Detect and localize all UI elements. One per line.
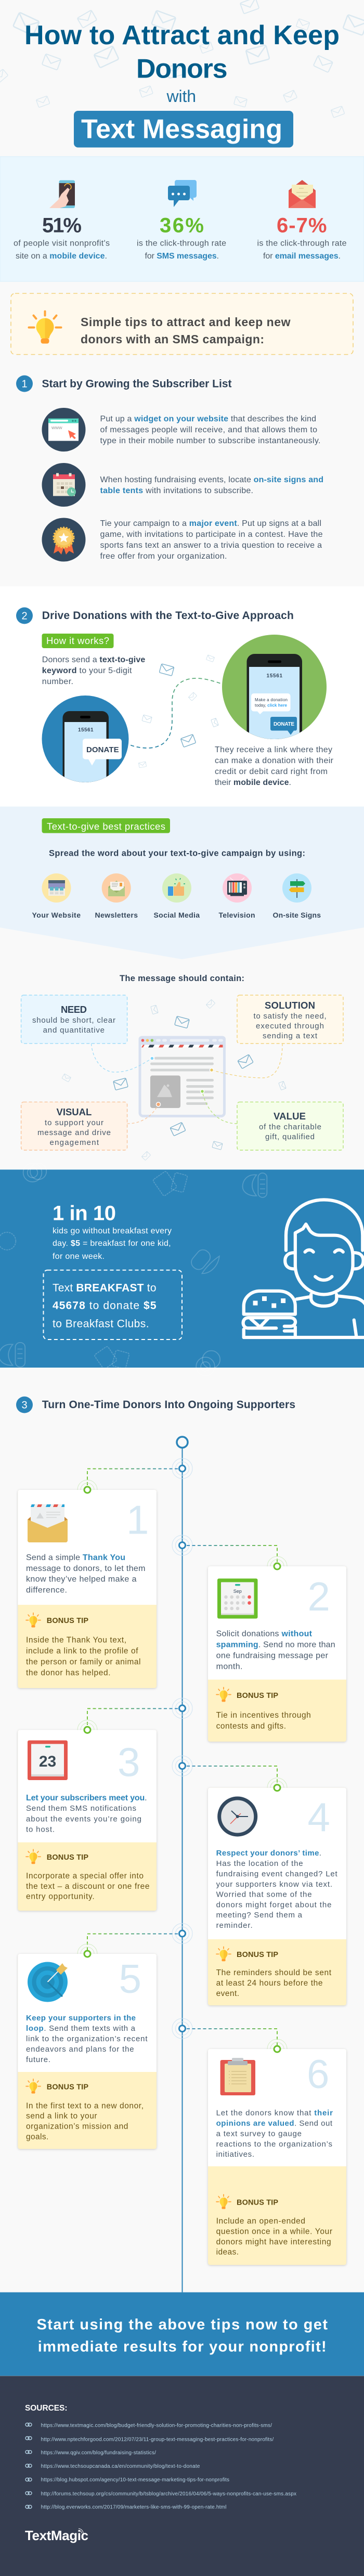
- bonus tip: ideas.: [216, 2248, 239, 2257]
- card 4: respect time: reminder.: [216, 1921, 253, 1930]
- card 6: opinions valued: 6: [307, 2051, 329, 2096]
- title: with: [166, 87, 196, 106]
- stat: email click-through: [257, 180, 347, 261]
- callout: visual: engagement: [50, 1138, 99, 1147]
- channel: newsletters: [95, 873, 138, 919]
- channel: your website: Your Website: [32, 911, 81, 919]
- bonus tip: BONUS TIP: [237, 2199, 278, 2207]
- label: how it works: [42, 634, 113, 648]
- callout: simple tips: donors with an SMS campaign:: [81, 332, 264, 346]
- card 5: keep in the loop: endeavors and plans for the: [26, 2045, 134, 2054]
- channel: your website: [32, 873, 81, 919]
- card 3: meet subscribers: about the events you’re going: [26, 1814, 141, 1824]
- bonus tip: BONUS TIP: [237, 1692, 278, 1700]
- bonus tip: goals.: [26, 2133, 48, 2142]
- bonus tip: [216, 1688, 311, 1731]
- background envelope pattern: [0, 0, 364, 118]
- footer: sources: http://www.nptechforgood.com/2012/07/23/11-group-text-messaging-best-practices-for-nonprofits/: [41, 2437, 274, 2442]
- card 4: respect time: your supporters know via text.: [216, 1880, 332, 1889]
- callout: visual: VISUAL: [56, 1106, 92, 1117]
- card 3: meet subscribers: Let your subscribers meet you.: [26, 1794, 147, 1802]
- message envelopes: [62, 999, 286, 1161]
- illustration: message browser window: [138, 1036, 226, 1116]
- bonus tip: [26, 1849, 150, 1901]
- stat: SMS click-through: is the click-through rate: [137, 239, 226, 248]
- footer: sources: https://www.qgiv.com/blog/fundraising-statistics/: [41, 2450, 156, 2456]
- callout: value: [237, 1102, 343, 1150]
- callout: visual: [21, 1102, 127, 1150]
- section 3 heading: Turn One-Time Donors Into Ongoing Supporters: [42, 1399, 295, 1411]
- card 6: opinions valued: opinions are valued. Send out: [216, 2119, 333, 2128]
- title: [24, 20, 340, 148]
- section 1 heading: [16, 376, 232, 392]
- bonus tip: question once in a while. Your: [216, 2227, 332, 2236]
- panel: major event tip: [42, 518, 323, 562]
- callout: solution: executed through: [256, 1022, 324, 1031]
- panel: major event tip: Tie your campaign to a major event. Put up signs at a ball: [100, 519, 321, 528]
- card 3: meet subscribers: to host.: [26, 1825, 55, 1834]
- stat: email click-through: for email messages.: [263, 252, 341, 261]
- panel: on-site signs tip: table tents with invitations to subscribe.: [100, 486, 253, 495]
- callout: solution: [237, 995, 343, 1044]
- title: Text Messaging: [81, 114, 282, 145]
- text: receive link: can make a donation with their: [215, 756, 334, 765]
- icon: chat bubbles: [168, 180, 197, 207]
- bonus tip: Inside the Thank You text,: [26, 1636, 126, 1645]
- stat: email click-through: 6-7%: [277, 214, 327, 237]
- stat: SMS click-through: [137, 180, 226, 261]
- icon: award badge: [42, 518, 85, 562]
- icon: browser window: [42, 408, 85, 452]
- icon: light bulb: [29, 311, 61, 343]
- icon: red calendar: [28, 1741, 68, 1780]
- bonus tip: [216, 1947, 332, 1998]
- text: receive link: their mobile device.: [215, 778, 291, 787]
- icon: clipboard: [220, 2058, 255, 2095]
- card 2: without spamming: [208, 1563, 346, 1742]
- bonus tip: include a link to the profile of: [26, 1647, 138, 1656]
- card 1: thank you: difference.: [26, 1586, 67, 1595]
- card 1: thank you: Send a simple Thank You: [26, 1553, 125, 1562]
- callout: solution: SOLUTION: [265, 1000, 315, 1011]
- panel: website widget tip: type in their mobile number to subscribe instantaneously.: [100, 436, 320, 445]
- section 3 heading: [16, 1396, 295, 1413]
- call to action band: immediate results for your nonprofit!: [38, 2339, 327, 2355]
- card 6: opinions valued: Let the donors know that their: [216, 2109, 333, 2118]
- text: send keyword: [42, 655, 145, 686]
- section 2 heading: [16, 608, 294, 624]
- illustration: phone with donation link: DONATE: [274, 722, 294, 727]
- bonus tip: at least 24 hours before the: [216, 1979, 322, 1988]
- card 3: meet subscribers: 3: [118, 1739, 140, 1785]
- panel: website widget tip: of messages people will receive, and that allows them to: [100, 426, 317, 434]
- panel: website widget tip: [42, 408, 320, 452]
- icon: newsletter envelope: [102, 873, 131, 903]
- callout: simple tips: [11, 293, 353, 355]
- bonus tip: Include an open-ended: [216, 2217, 305, 2225]
- panel: website widget tip: Put up a widget on your website that describes the kind: [100, 415, 316, 423]
- illustration: phone with donation link: [222, 635, 327, 742]
- arrow: dashed flow between phones: [130, 678, 232, 748]
- card 4: respect time: Has the location of the: [216, 1859, 303, 1868]
- panel: major event tip: game, with invitations to participate in a contest. Have the: [100, 530, 323, 539]
- callout: need: should be short, clear: [32, 1016, 115, 1025]
- card 3: meet subscribers: Send them SMS notifications: [26, 1804, 136, 1813]
- flying envelopes: [138, 655, 218, 768]
- heading: spread the word: Spread the word about your text-to-give campaign by using:: [49, 849, 305, 858]
- callout: value: VALUE: [274, 1111, 306, 1122]
- icon: green calendar: Sep: [233, 1589, 242, 1594]
- card 4: respect time: 4: [308, 1794, 330, 1840]
- icon: website: [42, 873, 71, 903]
- bonus tip: the person or family or animal: [26, 1658, 140, 1667]
- bonus tip: Incorporate a special offer into: [26, 1872, 144, 1881]
- label: text-to-give best practices: [42, 818, 170, 833]
- card 5: keep in the loop: 5: [119, 1955, 141, 2001]
- decorative bakery pattern: [0, 1163, 267, 1376]
- callout: text breakfast: Text BREAKFAST to: [53, 1282, 156, 1294]
- callout: value: gift, qualified: [265, 1132, 315, 1141]
- heading: the message should contain: The message should contain:: [120, 974, 244, 983]
- channel: social media: [154, 873, 200, 919]
- illustration: phone with donation link: 15561: [266, 673, 282, 679]
- callout: text breakfast: to Breakfast Clubs.: [53, 1318, 149, 1330]
- call to action band: Start using the above tips now to get: [36, 2316, 328, 2333]
- card 2: without spamming: Solicit donations without: [216, 1630, 313, 1639]
- timeline: vertical line with nodes: [77, 1437, 287, 2292]
- channel: newsletters: Newsletters: [95, 911, 138, 919]
- card 4: respect time: Respect your donors’ time.: [216, 1849, 321, 1858]
- call to action band: [0, 2292, 364, 2376]
- illustration: phone with donate message: 15561: [78, 727, 94, 733]
- icon: phone with hand: [49, 180, 75, 208]
- callout: text breakfast: 45678 to donate $5: [53, 1300, 157, 1312]
- section 2 heading: Drive Donations with the Text-to-Give Approach: [42, 610, 294, 622]
- channel: social media: Social Media: [154, 911, 200, 919]
- icon: television: [223, 873, 252, 903]
- footer: sources: http://forums.techsoup.org/cs/community/b/tsblog/archive/2016/04/06/5-ways-nonprofits-can-use-sms.aspx: [41, 2491, 296, 2497]
- card 6: opinions valued: initiatives.: [216, 2150, 254, 2159]
- panel: breakfast clubs campaign: kids go without breakfast every: [53, 1227, 172, 1235]
- card 1: thank you: message to donors, to let them: [26, 1564, 146, 1573]
- channel: on-site signs: On-site Signs: [272, 911, 321, 919]
- card 5: keep in the loop: link to the organization’s recent: [26, 2034, 148, 2043]
- footer: sources: https://blog.hubspot.com/agency/10-text-message-marketing-tips-for-nonprofits: [41, 2477, 229, 2483]
- card 4: respect time: meeting? Send them a: [216, 1911, 303, 1920]
- section 2 heading: 2: [21, 611, 28, 622]
- bonus tip: [216, 2195, 332, 2257]
- bonus tip: [26, 1613, 140, 1678]
- bonus tip: BONUS TIP: [47, 2083, 88, 2092]
- channel: television: [218, 873, 255, 919]
- stat: SMS click-through: 36%: [160, 214, 204, 237]
- card 4: respect time: [208, 1785, 346, 2005]
- text: send keyword: Donors send a text-to-give: [42, 655, 145, 664]
- panel: on-site signs tip: [42, 463, 323, 507]
- bonus tip: BONUS TIP: [47, 1853, 88, 1862]
- title: How to Attract and Keep: [24, 20, 340, 50]
- card 5: keep in the loop: future.: [26, 2055, 50, 2064]
- bonus tip: BONUS TIP: [47, 1617, 88, 1625]
- bonus tip: entry opportunity.: [26, 1892, 95, 1901]
- panel: breakfast clubs campaign: [0, 1163, 364, 1376]
- stat: mobile visits: of people visit nonprofit's: [14, 239, 110, 248]
- card 4: respect time: Worried that some of the: [216, 1890, 312, 1899]
- card 2: without spamming: one fundraising message per: [216, 1651, 329, 1660]
- card 2: without spamming: spamming. Send no more than: [216, 1641, 335, 1650]
- section 3 heading: 3: [21, 1399, 28, 1411]
- bonus tip: the donor has helped.: [26, 1669, 110, 1678]
- stat: email click-through: is the click-through rate: [257, 239, 347, 248]
- bonus tip: Tie in incentives through: [216, 1711, 311, 1720]
- footer: sources: https://www.textmagic.com/blog/budget-friendly-solution-for-promoting-charities-non-profits-sms/: [41, 2423, 272, 2428]
- icon: target with arrow: [28, 1962, 68, 2002]
- callout: solution: sending a text: [263, 1032, 318, 1040]
- panel: breakfast clubs campaign: 1 in 10: [53, 1202, 116, 1225]
- card 6: opinions valued: [208, 2046, 346, 2265]
- card 4: respect time: donors might forget about the: [216, 1901, 332, 1910]
- label: how it works: How it works?: [46, 635, 109, 646]
- panel: major event tip: free offer from your organization.: [100, 552, 227, 561]
- icon: browser window: www: [51, 425, 62, 431]
- card 5: keep in the loop: [18, 1951, 157, 2149]
- footer: sources: https://www.techsoupcanada.ca/en/community/blog/text-to-donate: [41, 2464, 200, 2469]
- bonus tip: the text – a discount or one free: [26, 1882, 150, 1891]
- footer: sources: http://blog.everworks.com/2017/09/marketers-like-sms-with-99-open-rate.html: [41, 2505, 226, 2510]
- bonus tip: send a link to your: [26, 2112, 97, 2121]
- icon: green calendar: [217, 1578, 258, 1619]
- bonus tip: The reminders should be sent: [216, 1968, 332, 1977]
- card 1: thank you: [18, 1487, 157, 1688]
- card 1: thank you: know they’ve helped make a: [26, 1575, 137, 1584]
- text: receive link: credit or debit card right from: [215, 767, 328, 776]
- text: receive link: They receive a link where they: [215, 745, 332, 754]
- illustration: phone with donation link: today, click here: [255, 703, 288, 708]
- text: send keyword: number.: [42, 677, 73, 686]
- panel: best practices background: [0, 806, 364, 959]
- channel: on-site signs: [272, 873, 321, 919]
- bonus tip: organization’s mission and: [26, 2122, 128, 2131]
- bonus tip: event.: [216, 1989, 239, 1998]
- text: send keyword: keyword to your 5-digit: [42, 666, 132, 675]
- footer: sources: SOURCES:: [25, 2404, 68, 2413]
- panel: breakfast clubs campaign: day. $5 = breakfast for one kid,: [53, 1239, 171, 1248]
- bonus tip: In the first text to a new donor,: [26, 2102, 144, 2110]
- panel: on-site signs tip: When hosting fundraising events, locate on-site signs and: [100, 475, 323, 484]
- illustration: phone with donate message: [42, 695, 129, 785]
- panel: breakfast clubs campaign: for one week.: [53, 1252, 105, 1261]
- stat: SMS click-through: for SMS messages.: [145, 252, 219, 261]
- stat: mobile visits: site on a mobile device.: [16, 252, 107, 261]
- callout: value: of the charitable: [259, 1123, 321, 1131]
- callout: need: [21, 995, 127, 1044]
- callout: simple tips: Simple tips to attract and keep new: [81, 315, 291, 329]
- stat: mobile visits: 51%: [42, 214, 82, 237]
- bonus tip: donors might have interesting: [216, 2238, 331, 2246]
- arrows: callout connectors: [91, 1044, 282, 1124]
- callout: solution: to satisfy the need,: [254, 1012, 327, 1021]
- footer: sources: [0, 2376, 364, 2576]
- callout: visual: message and drive: [37, 1128, 111, 1137]
- stat: mobile visits: [14, 180, 110, 261]
- section 1 heading: 1: [21, 379, 28, 390]
- panel: statistics band: [0, 157, 364, 281]
- icon: thumbs up: [162, 873, 191, 903]
- logo: TextMagic: TextMagic: [25, 2528, 88, 2543]
- illustration: phone with donation link: Make a donation: [255, 698, 288, 702]
- icon: open envelope: [289, 180, 316, 208]
- card 2: without spamming: month.: [216, 1663, 242, 1671]
- icon: clock: [219, 1798, 256, 1835]
- icon: red calendar: 23: [39, 1753, 56, 1770]
- callout: need: NEED: [61, 1004, 87, 1015]
- card 5: keep in the loop: Keep your supporters in the: [26, 2014, 136, 2023]
- card 4: respect time: fundraising event changed? Let: [216, 1870, 338, 1878]
- icon: envelope with letter: [28, 1504, 68, 1542]
- card 5: keep in the loop: loop. Send them texts with a: [26, 2024, 136, 2033]
- card 1: thank you: 1: [126, 1497, 149, 1543]
- text: receive link: [215, 745, 334, 787]
- card 6: opinions valued: a text survey to gauge: [216, 2129, 302, 2138]
- bonus tip: [26, 2079, 144, 2142]
- title: Donors: [136, 54, 228, 84]
- callout: need: and quantitative: [43, 1026, 105, 1035]
- illustration: phone with donate message: DONATE: [86, 745, 119, 754]
- callout: visual: to support your: [45, 1118, 103, 1127]
- label: text-to-give best practices: Text-to-give best practices: [47, 821, 165, 832]
- card 2: without spamming: 2: [308, 1574, 330, 1619]
- section 1 heading: Start by Growing the Subscriber List: [42, 378, 232, 390]
- bonus tip: BONUS TIP: [237, 1951, 278, 1959]
- channel: television: Television: [218, 911, 255, 919]
- icon: signpost: [282, 873, 311, 903]
- card 3: meet subscribers: [18, 1727, 157, 1911]
- icon: calendar with clock: [42, 463, 85, 507]
- panel: major event tip: sports fans text an answer to a trivia question to receive a: [100, 541, 322, 550]
- card 6: opinions valued: reactions to the organization’s: [216, 2140, 332, 2148]
- callout: text breakfast: [44, 1270, 182, 1339]
- illustration: kid with burger: [243, 1200, 364, 1337]
- bonus tip: contests and gifts.: [216, 1722, 286, 1731]
